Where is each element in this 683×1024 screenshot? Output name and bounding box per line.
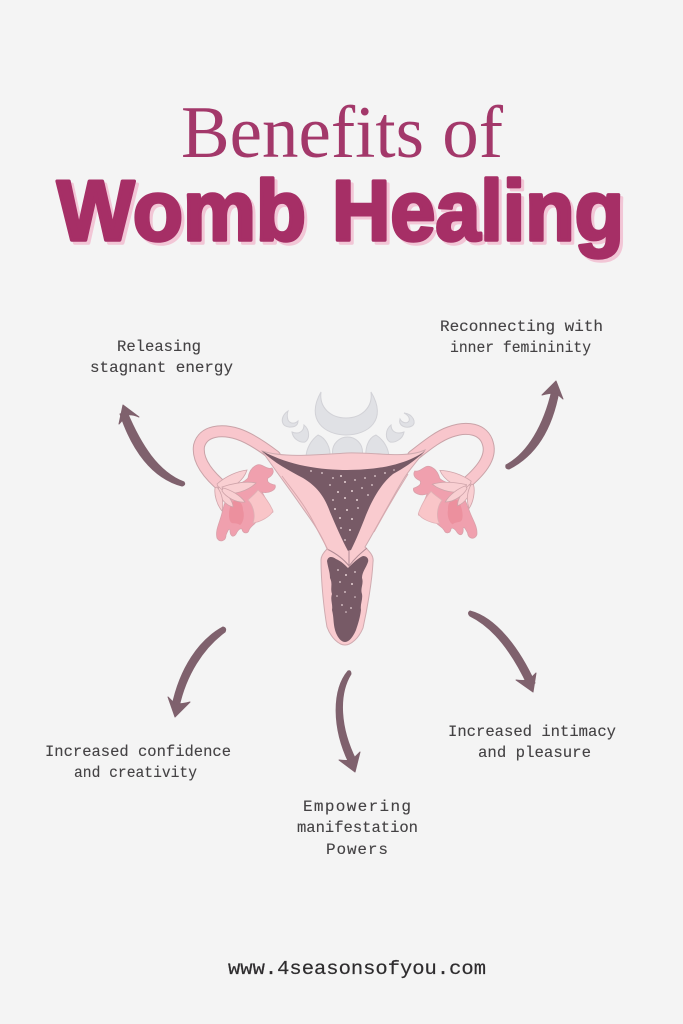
- website url: www.4seasonsofyou.com: [228, 958, 486, 980]
- arrow: to releasing stagnant energy: [119, 405, 185, 486]
- label: increased confidence and creativity: [45, 743, 231, 782]
- icon: left ovary: [215, 465, 275, 541]
- left fallopian tube: [199, 431, 275, 488]
- right fallopian tube: [413, 429, 489, 486]
- label: reconnecting with inner femininity: inner femininity: [450, 339, 591, 357]
- sparkle dots: [310, 469, 395, 613]
- illustration: uterus: [199, 429, 489, 645]
- label: increased confidence and creativity: and creativity: [74, 764, 197, 782]
- title: Womb Healing: Womb: [57, 164, 306, 259]
- arrow: to reconnecting with inner femininity: [506, 381, 563, 469]
- label: releasing stagnant energy: Releasing: [117, 338, 201, 356]
- title: Womb Healing: Womb: [60, 167, 309, 262]
- label: empowering manifestation powers: Empowering: [303, 798, 411, 816]
- arrow: to increased confidence and creativity: [168, 627, 226, 717]
- label: empowering manifestation powers: Powers: [326, 841, 388, 859]
- label: increased confidence and creativity: Increased confidence: [45, 743, 231, 761]
- label: empowering manifestation powers: manifestation: [297, 819, 418, 837]
- label: reconnecting with inner femininity: Reconnecting with: [440, 318, 603, 336]
- cervical line: [327, 548, 367, 566]
- icon: moon phases: [282, 392, 414, 467]
- title: Womb Healing: Healing: [335, 167, 627, 262]
- label: increased intimacy and pleasure: and pleasure: [478, 744, 591, 762]
- uterus body: [262, 450, 425, 645]
- label: empowering manifestation powers: [297, 798, 418, 859]
- title: Womb Healing: Healing: [332, 164, 624, 259]
- label: releasing stagnant energy: [90, 338, 233, 377]
- label: increased intimacy and pleasure: [448, 723, 616, 762]
- icon: right ovary: [411, 462, 479, 544]
- label: reconnecting with inner femininity: [440, 318, 603, 357]
- arrow: to increased intimacy and pleasure: [468, 611, 536, 692]
- label: increased intimacy and pleasure: Increased intimacy: [448, 723, 616, 741]
- uterine cavity: [262, 451, 425, 551]
- title: Womb Healing: [57, 164, 627, 262]
- arrow: to empowering manifestation powers: [336, 671, 360, 772]
- label: releasing stagnant energy: stagnant energy: [90, 359, 233, 377]
- edge shading: [282, 474, 408, 550]
- lower canal: [327, 556, 368, 642]
- title: Benefits of: Benefits of: [181, 92, 503, 174]
